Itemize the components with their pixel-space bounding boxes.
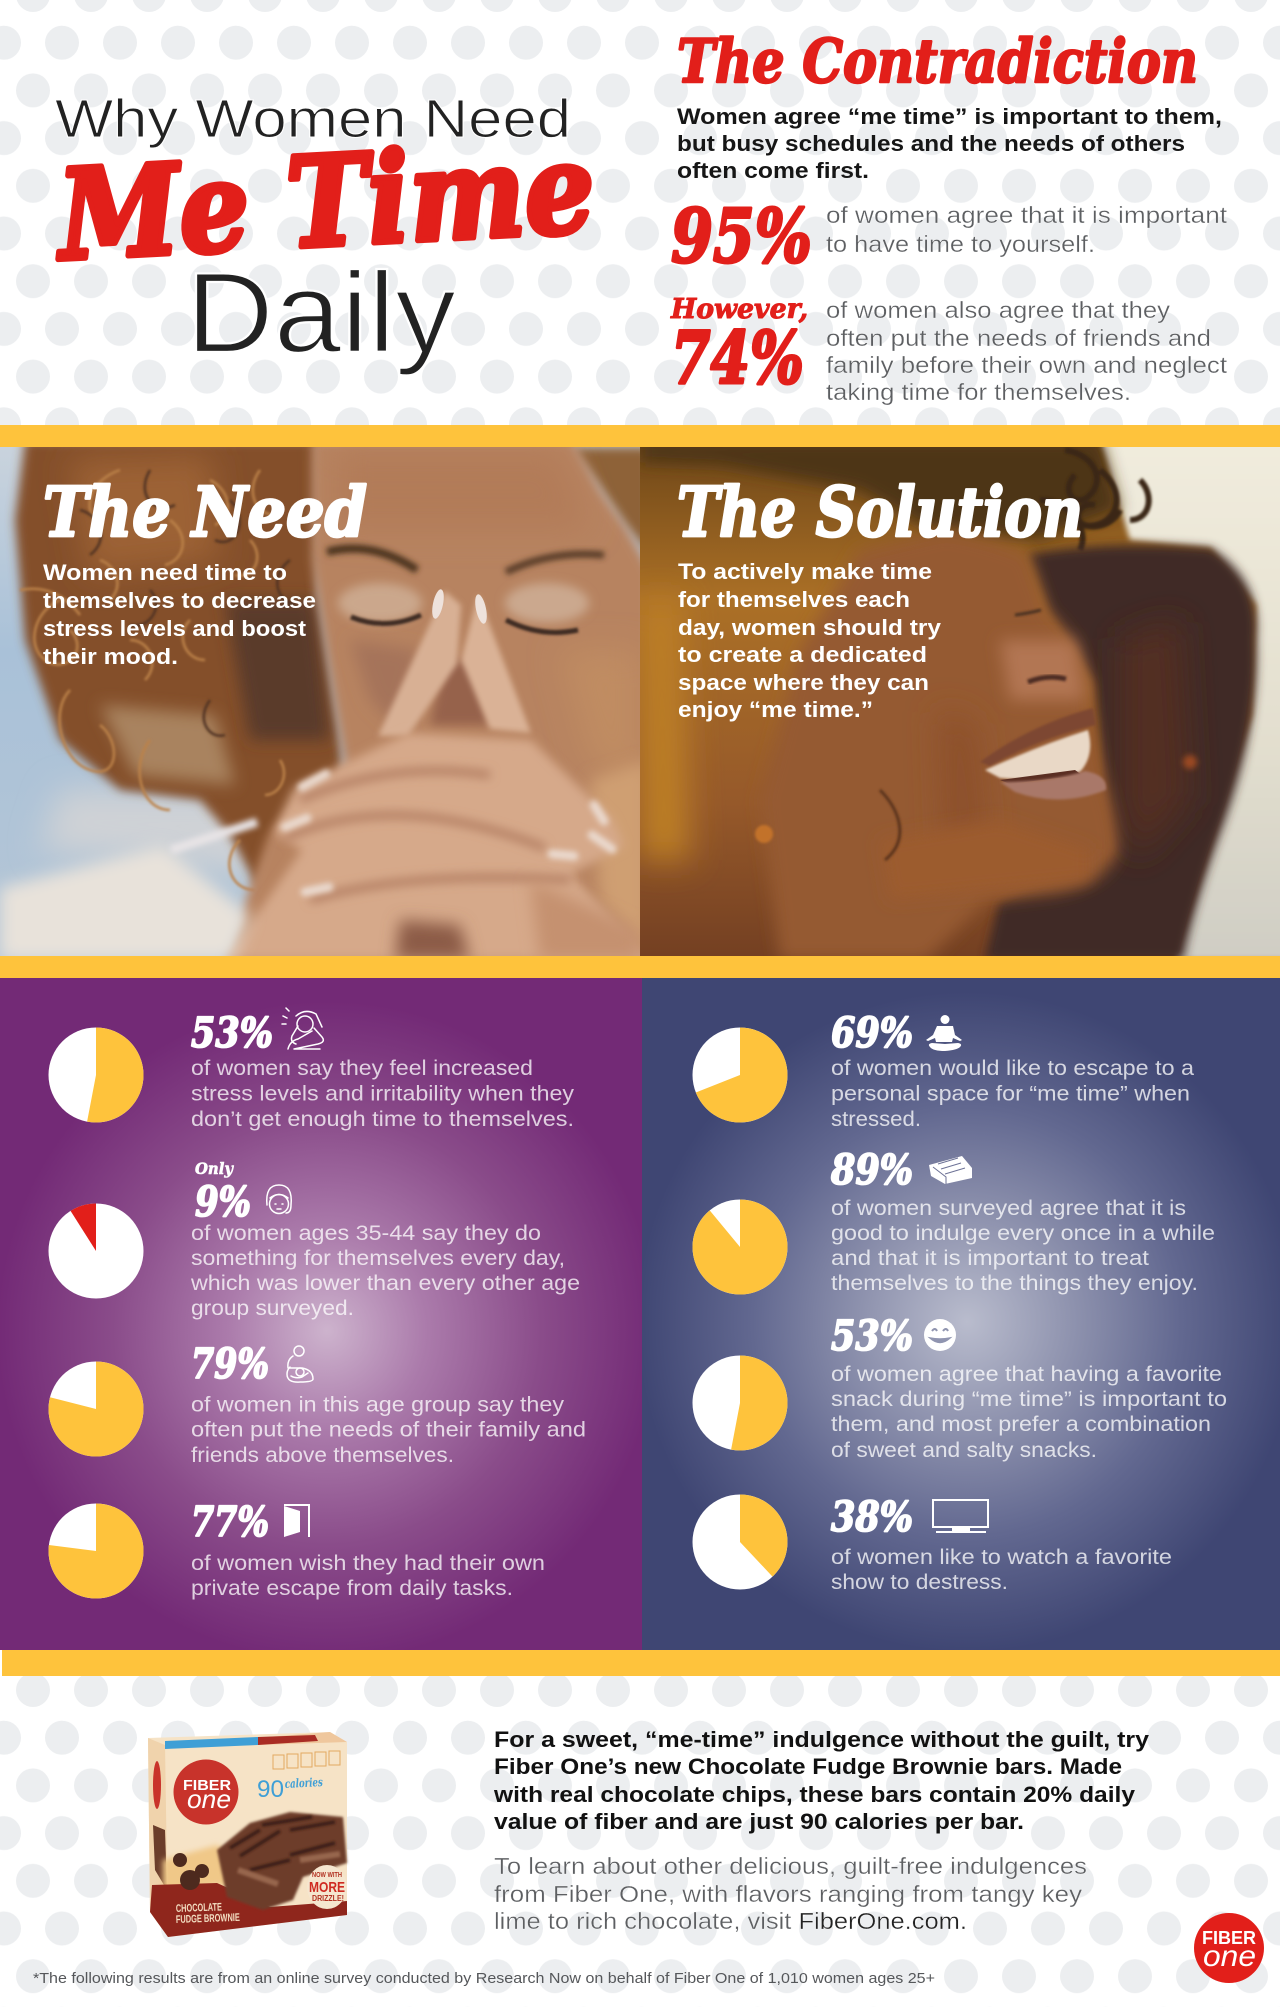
text: need description: their mood.: [43, 644, 178, 669]
text: 53% description: don’t get enough time to themselves.: [191, 1107, 574, 1131]
logo: Fiber One: one: [1203, 1940, 1256, 1973]
text: solution description: [678, 559, 942, 722]
stat row: 53% snack: [692, 1312, 1227, 1462]
value: 53%: 53%: [831, 1312, 913, 1360]
text: 79% description: often put the needs of their family and: [191, 1418, 586, 1442]
footnote: *The following results are from an online survey conducted by Research Now on behalf of Fiber One of 1,010 women ages 25+: [33, 1971, 935, 1987]
product box: Fiber One brownies: one: [187, 1784, 231, 1814]
text: 89% description: themselves to the things they enjoy.: [831, 1271, 1198, 1295]
text: need description: themselves to decrease: [43, 588, 316, 613]
icon: meditation: [926, 1015, 962, 1051]
value: 9%: 9%: [195, 1178, 251, 1226]
stat row: 77%: [48, 1498, 545, 1600]
text: product description: [493, 1727, 1150, 1834]
text: solution description: for themselves each: [678, 587, 910, 612]
text: 53% snack description: them, and most prefer a combination: [831, 1412, 1211, 1436]
panel: the need photo: [0, 440, 650, 960]
text: 74% description: [826, 297, 1228, 405]
product box: Fiber One brownies: FUDGE BROWNIE: [176, 1912, 240, 1926]
text: 69% description: of women would like to escape to a: [831, 1056, 1194, 1080]
text: need description: stress levels and boost: [43, 616, 307, 641]
text: 53% description: [191, 1056, 574, 1131]
panel: the solution photo: [640, 440, 1280, 960]
title: Why Women Need Me Time Daily: [51, 89, 598, 377]
text: 89% description: [831, 1196, 1215, 1295]
stat: However, 74%: [670, 294, 808, 400]
pie chart: 9%: [48, 1204, 144, 1298]
text: 89% description: of women surveyed agree that it is: [831, 1196, 1186, 1220]
label: Only: Only: [195, 1159, 235, 1178]
text: solution description: enjoy “me time.”: [678, 697, 873, 722]
product box: Fiber One brownies: [148, 1732, 347, 1937]
text: 77% description: private escape from daily tasks.: [191, 1576, 513, 1600]
value: 79%: 79%: [191, 1340, 269, 1388]
text: 95% description: [826, 202, 1228, 257]
stat: However, 74%: However,: [670, 294, 808, 325]
pie chart: 69%: [692, 1028, 788, 1122]
title: Why Women Need Me Time Daily: Daily: [186, 250, 456, 377]
text: need description: [43, 560, 316, 669]
pie chart: 38%: [692, 1494, 788, 1590]
text: 79% description: friends above themselves.: [191, 1443, 454, 1467]
text: 89% description: and that it is important to treat: [831, 1246, 1149, 1270]
logo: Fiber One: [1194, 1913, 1264, 1983]
heading: The Need: The Need: [43, 473, 367, 553]
text: 53% snack description: of women agree that having a favorite: [831, 1362, 1222, 1386]
text: contradiction intro: often come first.: [677, 158, 869, 183]
text: 9% description: group surveyed.: [191, 1296, 354, 1320]
title: Why Women Need Me Time Daily: Why Women Need: [55, 89, 571, 149]
pie chart: 77%: [48, 1504, 144, 1599]
heading: The Solution: The Solution: [677, 473, 1083, 553]
icon: brownie: [929, 1156, 972, 1184]
text: 53% snack description: [831, 1362, 1227, 1462]
text: 9% description: something for themselves every day,: [191, 1246, 565, 1270]
text: 53% description: stress levels and irritability when they: [191, 1082, 574, 1106]
text: 38% description: of women like to watch a favorite: [831, 1545, 1172, 1569]
pie chart: 53%: [48, 1028, 144, 1122]
text: call to action: from Fiber One, with flavors ranging from tangy key: [494, 1881, 1083, 1907]
text: 69% description: [831, 1056, 1194, 1131]
text: 53% snack description: of sweet and salty snacks.: [831, 1438, 1097, 1462]
text: contradiction intro: Women agree “me time” is important to them,: [677, 104, 1222, 129]
text: solution description: To actively make time: [678, 559, 932, 584]
title: Why Women Need Me Time Daily: Me Time: [51, 116, 598, 289]
value: 69%: 69%: [831, 1009, 913, 1057]
text: product description: For a sweet, “me-time” indulgence without the guilt, try: [494, 1727, 1150, 1752]
text: product description: with real chocolate chips, these bars contain 20% daily: [493, 1782, 1136, 1807]
icon: television: [933, 1500, 988, 1533]
heading: The Contradiction: The Contradiction: [677, 27, 1198, 97]
text: solution description: to create a dedicated: [678, 642, 927, 667]
text: product description: value of fiber and are just 90 calories per bar.: [494, 1809, 1024, 1834]
text: 38% description: [831, 1545, 1172, 1594]
value: 38%: 38%: [831, 1493, 913, 1541]
text: product description: Fiber One’s new Chocolate Fudge Brownie bars. Made: [494, 1754, 1122, 1779]
text: 89% description: good to indulge every once in a while: [831, 1221, 1215, 1245]
text: 9% description: which was lower than every other age: [190, 1271, 580, 1295]
text: 38% description: show to destress.: [831, 1570, 1008, 1594]
logo: Fiber One: FIBER: [1202, 1928, 1256, 1948]
pie chart: 89%: [692, 1200, 788, 1294]
text: 74% description: of women also agree that they: [826, 297, 1171, 323]
product box: Fiber One brownies: FIBER: [183, 1777, 231, 1794]
text: 95% description: of women agree that it is important: [826, 202, 1228, 228]
icon: smiley: [924, 1319, 956, 1351]
text: 74% description: family before their own and neglect: [826, 352, 1228, 378]
product box: Fiber One brownies: DRIZZLE!: [312, 1894, 344, 1903]
product box: Fiber One brownies: NOW WITH: [312, 1872, 342, 1879]
pie chart: 79%: [48, 1362, 144, 1457]
text: solution description: day, women should try: [678, 615, 942, 640]
pie chart: 53%: [692, 1356, 788, 1451]
text: call to action: [494, 1853, 1087, 1934]
value: 53%: 53%: [191, 1009, 273, 1057]
product box: Fiber One brownies: calories: [284, 1775, 323, 1791]
stat row: 53% stress: [48, 1008, 574, 1131]
panel: the contradiction: [670, 27, 1228, 405]
text: 9% description: of women ages 35-44 say they do: [191, 1221, 541, 1245]
text: 79% description: of women in this age group say they: [191, 1392, 564, 1416]
stat row: 89%: [692, 1146, 1215, 1295]
icon: stressed woman: [282, 1008, 323, 1049]
text: 53% snack description: snack during “me time” is important to: [831, 1387, 1227, 1411]
value: 89%: 89%: [830, 1146, 913, 1194]
icon: face mask: [267, 1185, 291, 1214]
panel: navy solution statistics: [642, 978, 1280, 1650]
text: call to action: lime to rich chocolate, visit FiberOne.com.: [494, 1908, 967, 1934]
stat row: 79%: [48, 1340, 586, 1467]
value: 77%: 77%: [191, 1498, 269, 1546]
icon: mother and child: [287, 1346, 313, 1382]
text: 69% description: personal space for “me time” when: [831, 1082, 1190, 1106]
text: call to action: To learn about other delicious, guilt-free indulgences: [494, 1853, 1087, 1879]
text: need description: Women need time to: [43, 560, 287, 585]
text: contradiction intro: but busy schedules and the needs of others: [677, 131, 1185, 156]
text: 69% description: stressed.: [831, 1107, 921, 1131]
text: 53% description: of women say they feel increased: [191, 1056, 533, 1080]
stat row: 38%: [692, 1493, 1172, 1594]
product box: Fiber One brownies: CHOCOLATE: [176, 1901, 222, 1915]
stat row: 69%: [692, 1009, 1194, 1131]
text: 79% description: [191, 1392, 586, 1467]
stat row: only 9%: [48, 1159, 580, 1320]
product box: Fiber One brownies: MORE: [309, 1879, 345, 1896]
text: 95% description: to have time to yourself.: [826, 231, 1095, 257]
text: 77% description: [191, 1551, 545, 1600]
stat: 95%: 95%: [671, 194, 812, 280]
text: solution description: space where they can: [678, 670, 929, 695]
stat: However, 74%: 74%: [671, 315, 804, 400]
text: 74% description: taking time for themselves.: [826, 379, 1131, 405]
panel: purple need statistics: [0, 978, 642, 1650]
product box: Fiber One brownies: 90: [257, 1776, 284, 1803]
text: contradiction intro: [677, 104, 1222, 183]
text: 77% description: of women wish they had their own: [191, 1551, 545, 1575]
text: 74% description: often put the needs of friends and: [826, 325, 1211, 351]
icon: door: [284, 1505, 309, 1537]
text: 9% description: [190, 1221, 580, 1320]
